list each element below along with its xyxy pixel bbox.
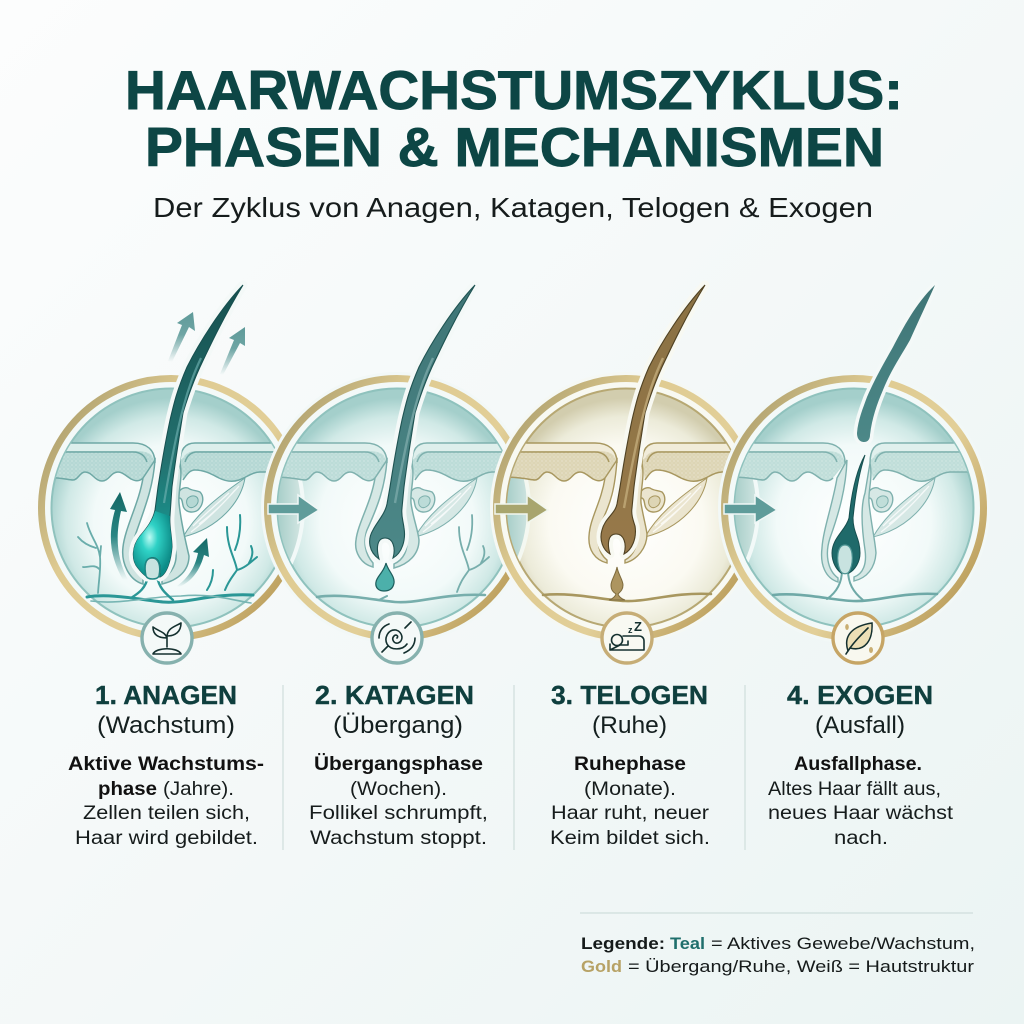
text block: anagen bbox=[68, 680, 264, 849]
text block: anagen: (Jahre). bbox=[163, 779, 234, 800]
new hair bbox=[832, 455, 865, 574]
legend: = Übergang/Ruhe, Weiß = Hautstruktur bbox=[628, 957, 974, 976]
crescent: overlap with previous circle bbox=[278, 451, 304, 565]
text block: katagen: (Wochen). bbox=[350, 779, 447, 800]
text block: katagen bbox=[309, 680, 488, 849]
capillary bbox=[543, 594, 711, 601]
text block: anagen: Aktive Wachstums- bbox=[68, 754, 264, 775]
text block: exogen bbox=[768, 680, 954, 849]
text block: exogen: nach. bbox=[834, 828, 888, 849]
hair shaft and bulb bbox=[370, 285, 475, 559]
icon: sleeping: z bbox=[628, 625, 633, 635]
text block: exogen: neues Haar wächst bbox=[768, 803, 954, 824]
panel: katagen circle bbox=[261, 284, 510, 638]
sheath bbox=[123, 460, 189, 584]
dividers bbox=[283, 685, 745, 850]
hair shaft and bulb bbox=[133, 285, 243, 579]
text block: exogen: Ausfallphase. bbox=[794, 754, 922, 775]
sheath bbox=[589, 460, 647, 563]
capillaries bbox=[773, 570, 937, 601]
legend: Teal bbox=[670, 934, 705, 953]
text block: anagen: (Wachstum) bbox=[97, 712, 235, 739]
text block: telogen: Haar ruht, neuer bbox=[551, 803, 710, 824]
legend bbox=[580, 913, 975, 976]
text block: katagen: 2. KATAGEN bbox=[315, 680, 474, 710]
new germ bbox=[609, 567, 625, 600]
icon: sprout bbox=[142, 613, 192, 663]
droplet bbox=[376, 563, 394, 591]
legend: = Aktives Gewebe/Wachstum, bbox=[711, 934, 975, 953]
sheath bbox=[356, 460, 419, 568]
text block: telogen: Ruhephase bbox=[574, 754, 686, 775]
text block: telogen: (Monate). bbox=[584, 779, 676, 800]
title: HAARWACHSTUMSZYKLUS: bbox=[125, 59, 903, 121]
text block: telogen bbox=[550, 680, 710, 849]
arrow: anagen to katagen bbox=[268, 495, 319, 523]
subtitle: Der Zyklus von Anagen, Katagen, Telogen & Exogen bbox=[153, 192, 873, 223]
panel: exogen circle bbox=[718, 285, 987, 639]
crescent: overlap with previous circle bbox=[507, 454, 530, 562]
panel: anagen circle bbox=[36, 285, 306, 638]
text block: anagen: 1. ANAGEN bbox=[95, 680, 237, 710]
text block: anagen: phase bbox=[98, 779, 157, 800]
sheath bbox=[822, 460, 876, 582]
icon: leaf bbox=[833, 613, 883, 663]
text block: exogen: (Ausfall) bbox=[815, 712, 905, 739]
icon: sleeping bbox=[602, 613, 652, 663]
text block: katagen: Follikel schrumpft, bbox=[309, 803, 488, 824]
icon: spiral bbox=[372, 613, 422, 663]
icon: sleeping: Z bbox=[634, 619, 642, 634]
text block: katagen: (Übergang) bbox=[333, 712, 463, 739]
arrow: telogen to exogen bbox=[724, 495, 777, 523]
text block: exogen: Altes Haar fällt aus, bbox=[768, 779, 941, 800]
shed hair bbox=[857, 285, 935, 442]
text block: anagen: Haar wird gebildet. bbox=[75, 828, 258, 849]
crescent: overlap with previous circle bbox=[735, 453, 760, 563]
text block: katagen: Übergangsphase bbox=[314, 754, 483, 775]
arrows: growth upward bbox=[110, 312, 245, 587]
panel: telogen circle bbox=[490, 284, 738, 638]
text block: katagen: Wachstum stoppt. bbox=[310, 828, 487, 849]
legend: Legende: bbox=[581, 934, 665, 953]
text block: telogen: Keim bildet sich. bbox=[550, 828, 710, 849]
title bbox=[125, 59, 903, 178]
text block: anagen: Zellen teilen sich, bbox=[83, 803, 250, 824]
text block: exogen: 4. EXOGEN bbox=[787, 680, 933, 710]
arrow: katagen to telogen bbox=[495, 495, 548, 523]
text block: telogen: 3. TELOGEN bbox=[551, 680, 708, 710]
title: PHASEN & MECHANISMEN bbox=[145, 116, 884, 178]
capillaries bbox=[317, 515, 489, 602]
capillaries bbox=[78, 515, 257, 603]
text block: telogen: (Ruhe) bbox=[592, 712, 667, 739]
hair shaft and bulb bbox=[601, 285, 705, 554]
legend: Gold bbox=[581, 957, 622, 976]
